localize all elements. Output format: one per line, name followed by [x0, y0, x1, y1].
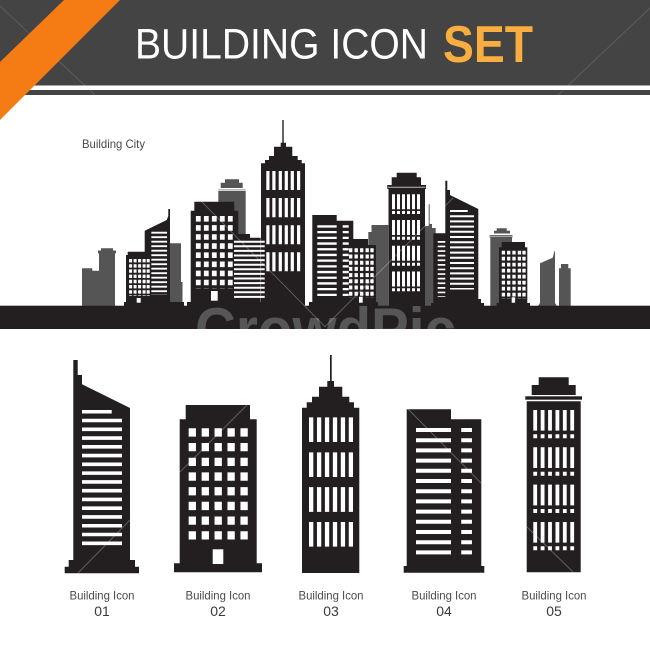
- label: icon 05: [522, 588, 586, 619]
- building icon 05: [525, 377, 582, 572]
- skyline heading: Building City: [82, 137, 145, 151]
- dark towers right: [309, 173, 530, 306]
- label: icon 02: 02: [210, 603, 226, 619]
- label: icon 01: Building Icon: [70, 588, 134, 602]
- title: SET: [443, 16, 533, 74]
- door: [213, 549, 223, 564]
- building icon 04: [404, 409, 484, 573]
- label: icon 02: Building Icon: [186, 588, 250, 602]
- label: icon 03: 03: [323, 603, 339, 619]
- building icon 02: [174, 405, 262, 572]
- label: icon 02: [186, 588, 250, 619]
- label: icon 05: 05: [546, 603, 562, 619]
- label: icon 01: [70, 588, 134, 619]
- orange corner ribbon: [0, 0, 120, 120]
- title: [135, 16, 533, 74]
- building icon 03: [302, 355, 359, 573]
- label: icon 01: 01: [94, 603, 110, 619]
- building icon 01: [65, 360, 139, 573]
- watermark diagonal lines: [78, 198, 573, 573]
- light roof stripes: [218, 187, 512, 236]
- background grey buildings: [82, 179, 571, 306]
- city skyline illustration: [0, 120, 650, 329]
- title: BUILDING ICON: [135, 22, 428, 68]
- ground band: [0, 306, 650, 329]
- label: icon 05: Building Icon: [522, 588, 586, 602]
- label: icon 04: Building Icon: [412, 588, 476, 602]
- label: icon 03: Building Icon: [298, 588, 364, 602]
- skyline windows: [131, 171, 524, 303]
- label: icon 04: 04: [436, 603, 452, 619]
- label: icon 03: [298, 588, 364, 619]
- label: icon 04: [412, 588, 476, 619]
- watermark text: CrowdPic: [195, 296, 456, 363]
- dark towers left: [124, 120, 305, 306]
- header banner: [0, 0, 650, 95]
